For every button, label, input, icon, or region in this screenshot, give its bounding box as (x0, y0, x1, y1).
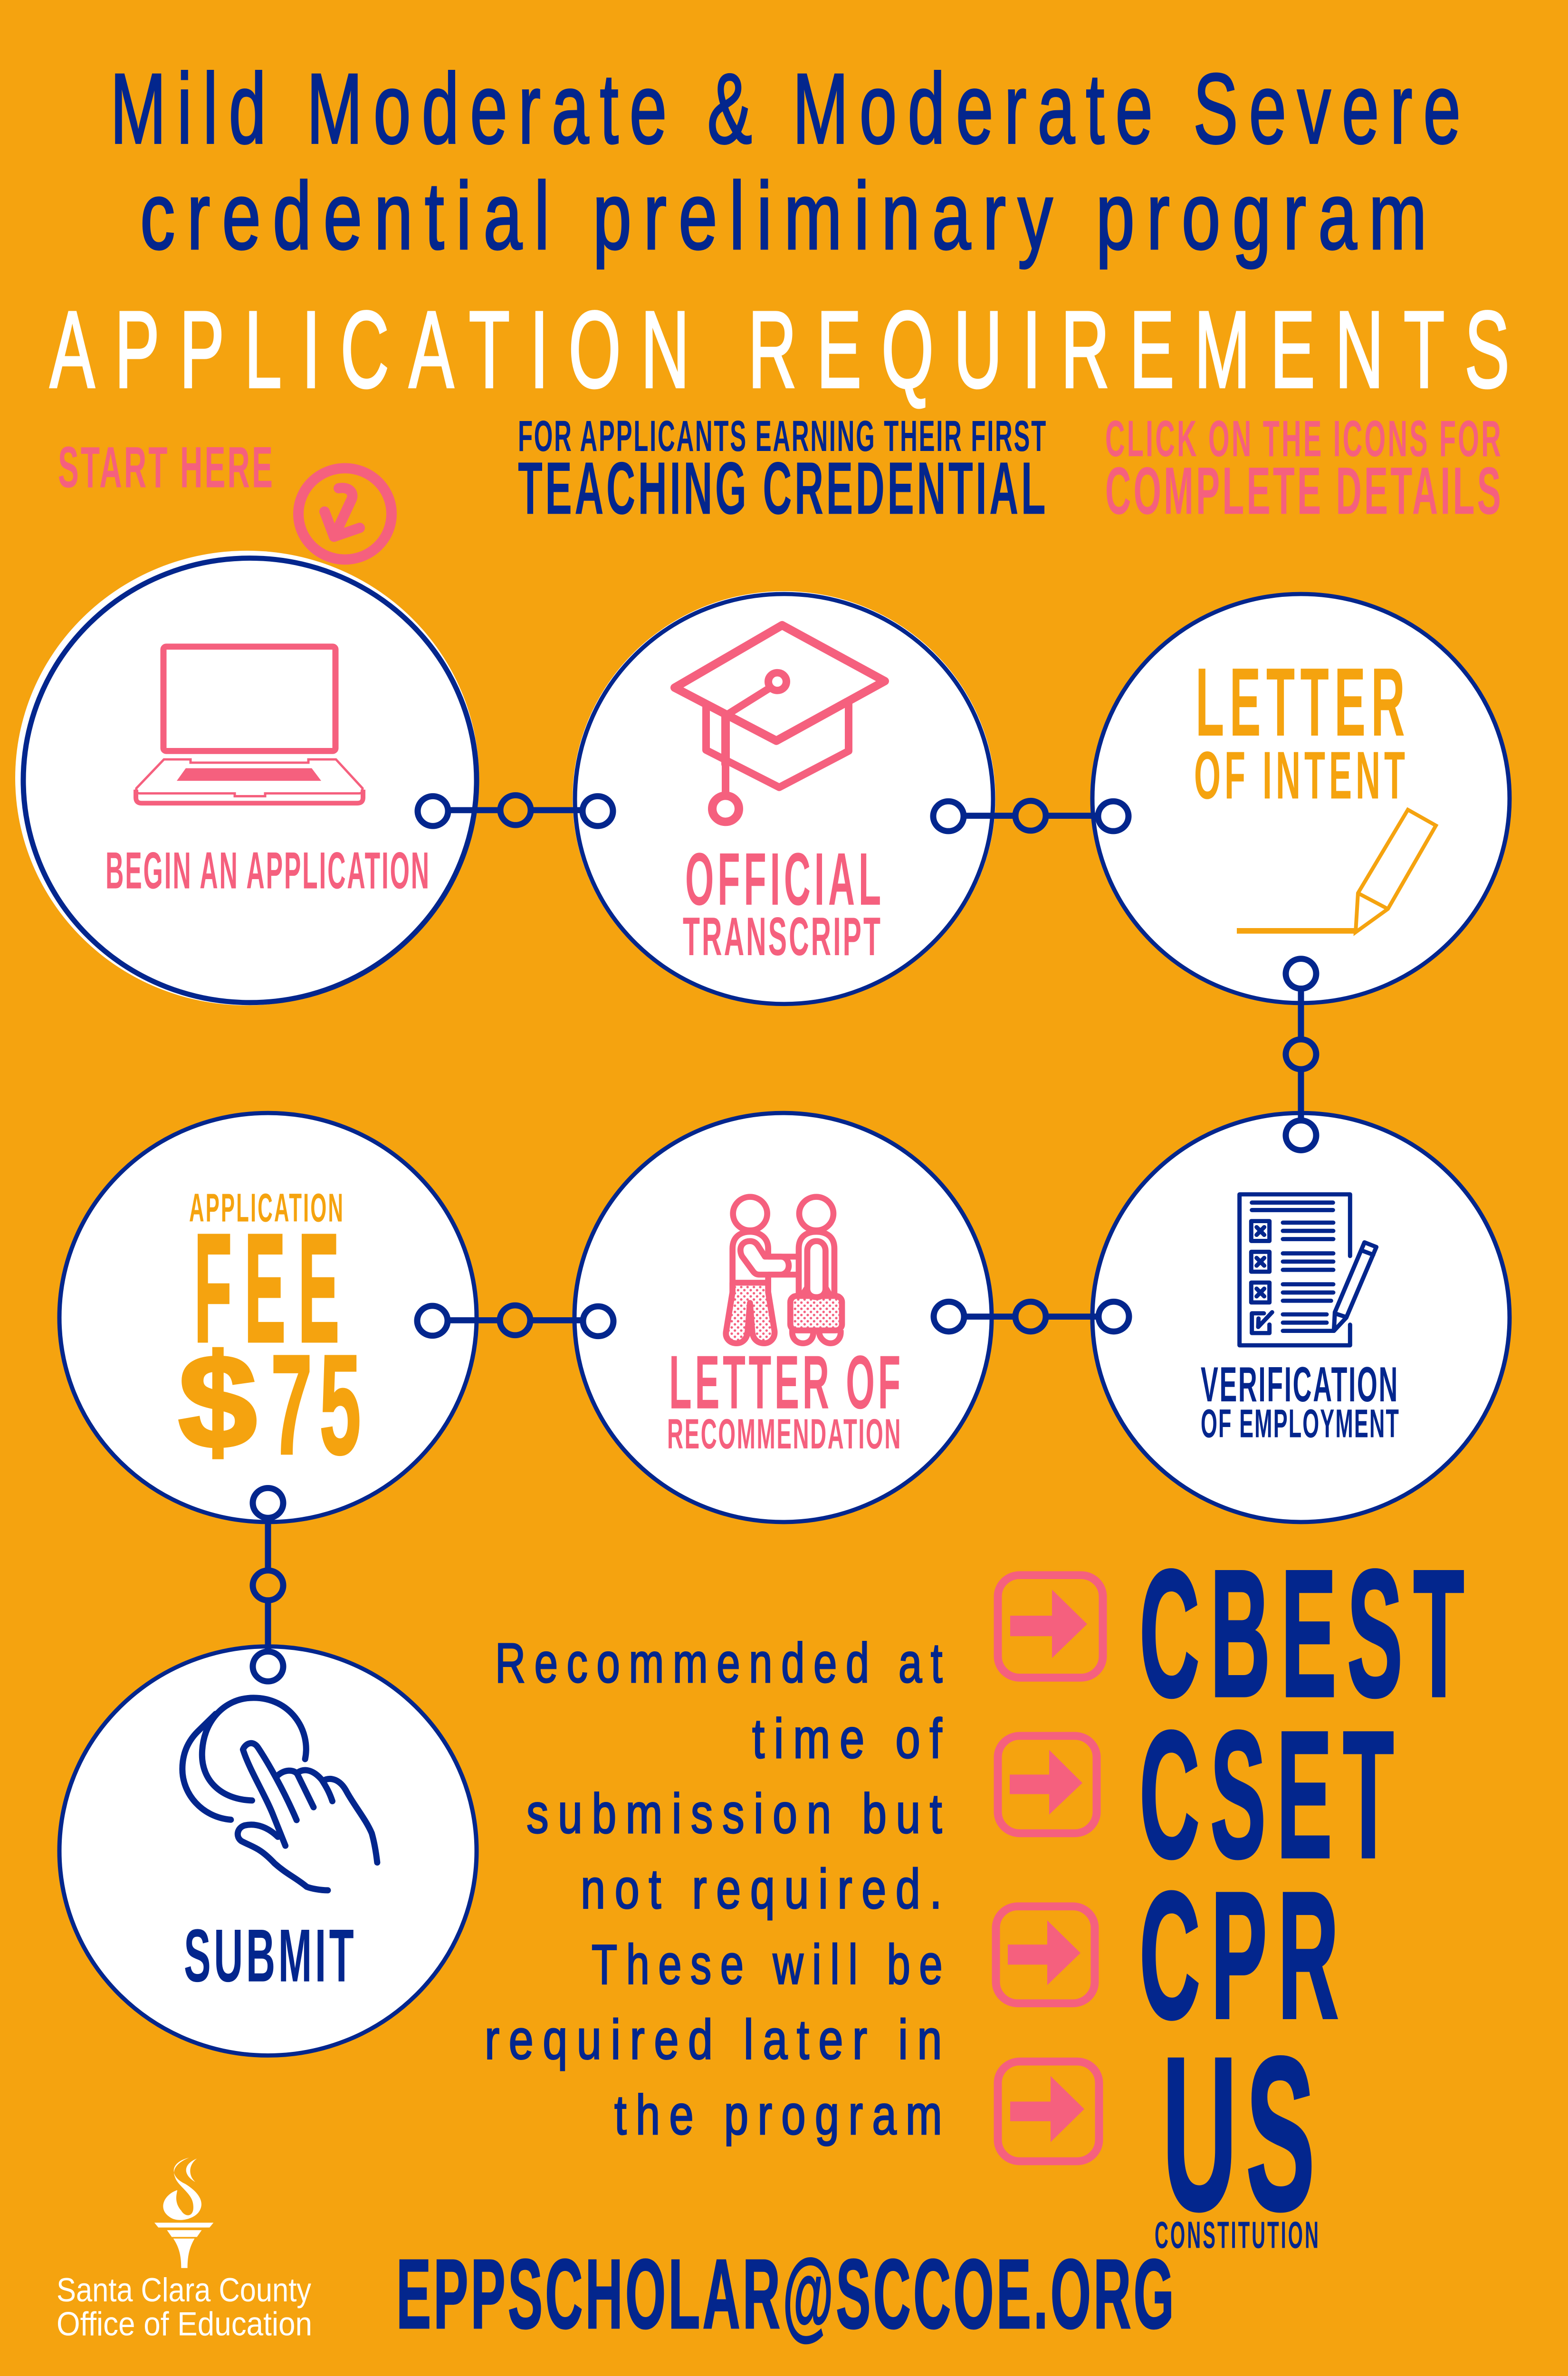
panel: official transcript (573, 591, 995, 1006)
title (110, 53, 1472, 269)
panel: application fee: FEE (194, 1202, 352, 1373)
label: SUBMIT (184, 1914, 357, 1997)
subheading: teaching credential: TEACHING CREDENTIAL (518, 447, 1048, 530)
connector: to recommendation (934, 1302, 1129, 1332)
icon: checklist with pencil (1240, 1194, 1377, 1345)
logo: county office of education (57, 2157, 312, 2343)
label (1201, 1357, 1400, 1446)
label (667, 1340, 904, 1458)
icon: arrow CBEST (998, 1575, 1103, 1677)
start here label: START HERE (58, 435, 275, 500)
label: APPLICATION (189, 1186, 344, 1230)
panel: letter of recommendation (574, 1113, 992, 1522)
label: Office of Education (57, 2305, 312, 2343)
connector: to fee (417, 1305, 613, 1336)
text block: recommended note: not required. (581, 1858, 951, 1920)
subheading: teaching credential: FOR APPLICANTS EARNING THEIR FIRST (518, 412, 1047, 460)
label (1194, 648, 1410, 813)
label: RECOMMENDATION (667, 1410, 902, 1458)
panel: application fee (59, 1113, 477, 1522)
connector: intent link (933, 801, 1128, 831)
panel: begin an application (15, 551, 479, 1006)
panel: letter of recommendation: LETTER OF (669, 1340, 904, 1425)
text block: recommended note: required later in (485, 2008, 951, 2071)
connector: transcript link (418, 795, 613, 826)
text block: recommended note: submission but (526, 1782, 951, 1845)
subheading: teaching credential (518, 412, 1048, 530)
connector: down to submit (253, 1488, 283, 1681)
icon: laptop (136, 647, 363, 803)
requirement: US constitution (1155, 2012, 1324, 2256)
label: 75 (271, 1325, 368, 1484)
icon: graduation cap (675, 625, 885, 822)
label: Santa Clara County (57, 2271, 311, 2309)
icon: circled arrow (298, 468, 392, 559)
icon: torch (154, 2157, 213, 2268)
icon: arrow US (998, 2061, 1099, 2161)
label (57, 2271, 312, 2343)
panel: official transcript: OFFICIAL (685, 837, 885, 921)
icon: people shaking hands (726, 1197, 842, 1343)
label: $ (179, 1328, 257, 1475)
text: US (1162, 2012, 1324, 2256)
label (179, 1186, 368, 1484)
panel: submit (59, 1647, 477, 2055)
text block: recommended note: time of (752, 1707, 951, 1770)
icon: arrow CSET (998, 1736, 1097, 1833)
panel: letter of intent (1092, 594, 1510, 1003)
text block: recommended note: Recommended at (495, 1632, 951, 1695)
panel: begin an application: BEGIN AN APPLICATION (105, 842, 430, 900)
icon: pencil (1237, 810, 1436, 932)
text block: recommended note: These will be (592, 1934, 951, 1996)
label: TRANSCRIPT (683, 907, 882, 967)
panel: verification of employment (1092, 1113, 1510, 1522)
icon: hand tapping (182, 1698, 377, 1890)
label (683, 837, 885, 967)
text block: recommended note: the program (614, 2084, 951, 2146)
requirement: US constitution: CONSTITUTION (1155, 2213, 1320, 2256)
connector: down to verification (1286, 959, 1316, 1150)
icon: arrow CPR (996, 1907, 1095, 2003)
click note (1105, 410, 1503, 528)
text block: recommended note (485, 1632, 951, 2146)
